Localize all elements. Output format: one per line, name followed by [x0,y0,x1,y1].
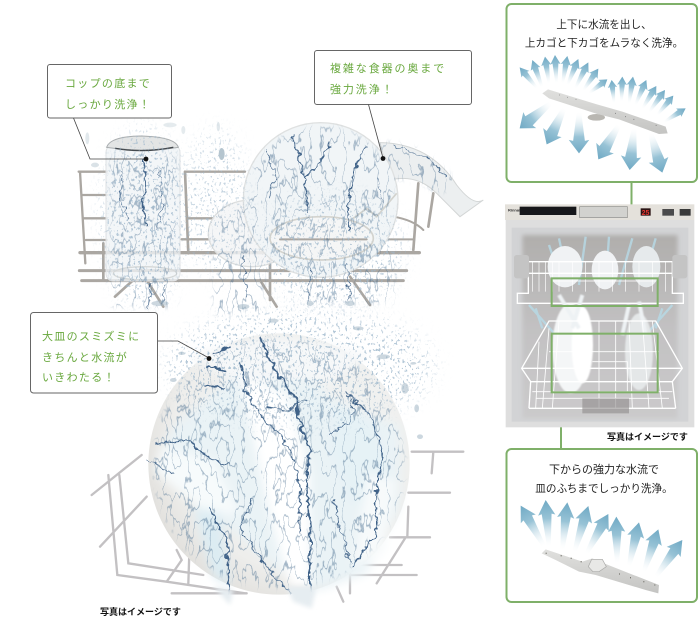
panel 1 text: 上カゴと下カゴをムラなく洗浄。 [525,36,683,50]
water jets in cabinet [529,237,672,335]
callout: glass: コップの底まで [65,77,151,90]
falling water below plate [213,587,317,608]
large plate [243,123,398,277]
water veins on plate [147,337,383,593]
panel 1 text: 上下に水流を出し、 [556,19,652,31]
water droplets above basket [85,122,225,167]
callout: large plate: いきわたる！ [42,371,116,384]
connector: upper panel to upper nozzle [630,182,632,278]
bowl ring [270,193,397,260]
dishwasher photo [505,204,694,427]
green highlight: lower nozzle [552,334,658,392]
lower basket wire rack [92,452,463,602]
dishes in lower rack [552,295,653,393]
callout: complex dishes: 複雑な食器の奥まで [330,61,446,75]
glass [106,136,180,281]
lower rack [522,321,682,413]
photo note left: 写真はイメージです [100,606,181,617]
photo note right: 写真はイメージです [607,431,688,442]
curved bowl [380,143,483,217]
dishes in upper rack [548,246,660,289]
callout: glass [48,64,172,161]
scene: large plate in lower basket [92,301,463,608]
water texture on upper basket [103,127,457,313]
panel 2 text [535,463,673,495]
control panel: 25 [642,210,650,217]
small plate [208,200,295,267]
scene: upper basket with glass and plates [79,122,483,313]
control panel: Rinnai [508,208,520,213]
spray arm with arrows [513,499,689,593]
callout: complex dishes [314,50,472,161]
panel 1 text [525,19,683,50]
callout: large plate: 大皿のスミズミに [42,329,140,343]
panel 2 text: 下からの強力な水流で [549,463,659,476]
connector: lower panel to lower nozzle [560,392,562,449]
callout: large plate: きちんと水流が [42,350,128,364]
upper rack [514,255,687,303]
control panel [505,204,694,220]
water texture on plate [154,310,433,589]
callout: glass: しっかり洗浄！ [65,97,151,111]
green highlight: upper nozzle [552,278,658,306]
splash droplets around plate [151,301,423,439]
plate [148,333,410,595]
panel 2 text: 皿のふちまでしっかり洗浄。 [535,482,673,495]
panel: upper and lower nozzle [506,4,697,182]
spray arm with arrows [513,55,688,176]
cabinet interior [506,220,694,427]
panel: lower nozzle [506,449,697,602]
callout: complex dishes: 強力洗浄！ [330,82,394,96]
water sheet on plate [153,338,400,590]
callout: large plate [30,312,211,393]
upper basket wire rack [79,172,433,307]
